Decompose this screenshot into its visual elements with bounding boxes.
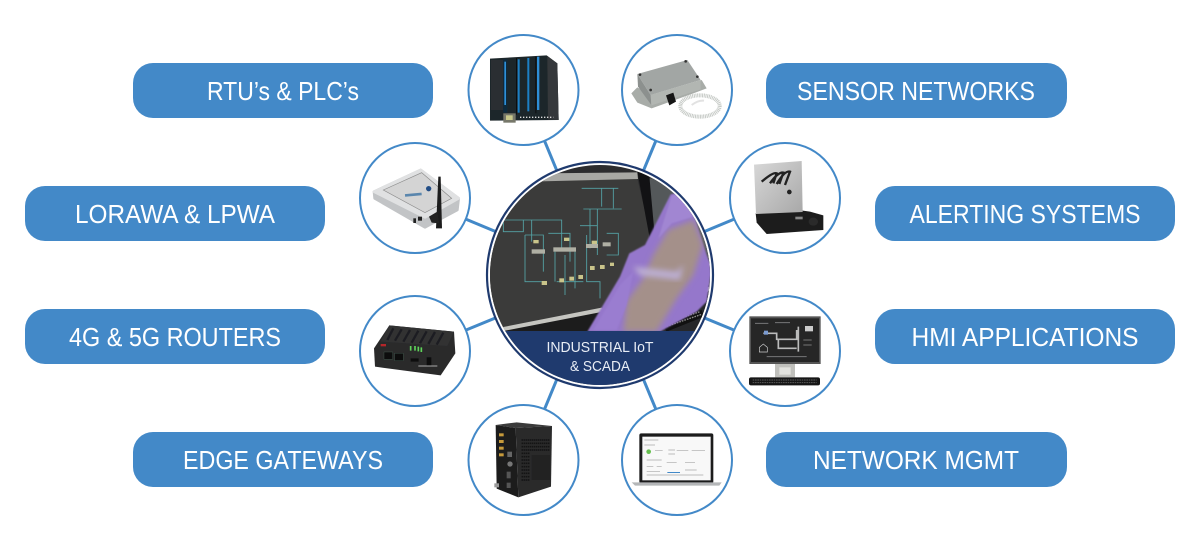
panel: alerting system device (730, 143, 840, 253)
label: ALERTING SYSTEMS: ALERTING SYSTEMS (910, 199, 1140, 229)
label: LORAWA & LPWA (25, 186, 325, 241)
label: SENSOR NETWORKS: SENSOR NETWORKS (797, 76, 1035, 106)
connector lines from hub to device circles (415, 90, 785, 460)
purple sleeve (587, 192, 712, 332)
schematic lines on the monitor (503, 188, 622, 298)
panel: LoRaWAN gateway device (360, 143, 470, 253)
icon: modular PLC rack (490, 55, 559, 123)
label: NETWORK MGMT (766, 432, 1067, 487)
icon: monitor with keyboard (749, 316, 821, 385)
panel: edge gateway device (468, 405, 578, 515)
icon: black cellular router (374, 325, 455, 375)
label: 4G & 5G ROUTERS (25, 309, 325, 364)
label: ALERTING SYSTEMS (875, 186, 1175, 241)
label: EDGE GATEWAYS (133, 432, 433, 487)
keyboard (665, 310, 703, 331)
caption banner (505, 331, 695, 385)
panel: network management device (622, 405, 732, 515)
label: HMI APPLICATIONS: HMI APPLICATIONS (912, 322, 1138, 352)
label: EDGE GATEWAYS: EDGE GATEWAYS (183, 445, 383, 475)
icon: white gateway with antenna (374, 170, 459, 228)
icon: laptop with dashboard (632, 433, 722, 486)
icon: grey sensor enclosure with cable (631, 60, 720, 117)
label: 4G & 5G ROUTERS: 4G & 5G ROUTERS (69, 322, 281, 352)
panel: RTU / PLC device (468, 35, 578, 145)
label: SENSOR NETWORKS (766, 63, 1067, 118)
icon: alert cabinet on base unit (754, 161, 823, 234)
caption banner: & SCADA (570, 358, 630, 375)
label: LORAWA & LPWA: LORAWA & LPWA (75, 199, 276, 229)
panel: 4G and 5G router device (360, 296, 470, 406)
label: RTU's & PLC's: RTU’s & PLC’s (207, 76, 359, 106)
label: HMI APPLICATIONS (875, 309, 1175, 364)
panel: central hub photo with caption (486, 160, 714, 390)
label: NETWORK MGMT: NETWORK MGMT (813, 445, 1019, 475)
label: RTU's & PLC's (133, 63, 433, 118)
caption banner: INDUSTRIAL IoT (546, 339, 654, 356)
panel: HMI application device (730, 296, 840, 406)
photo: operator at SCADA monitor (490, 165, 710, 385)
icon: rugged edge gateway box (494, 422, 552, 497)
panel: sensor network device (622, 35, 732, 145)
